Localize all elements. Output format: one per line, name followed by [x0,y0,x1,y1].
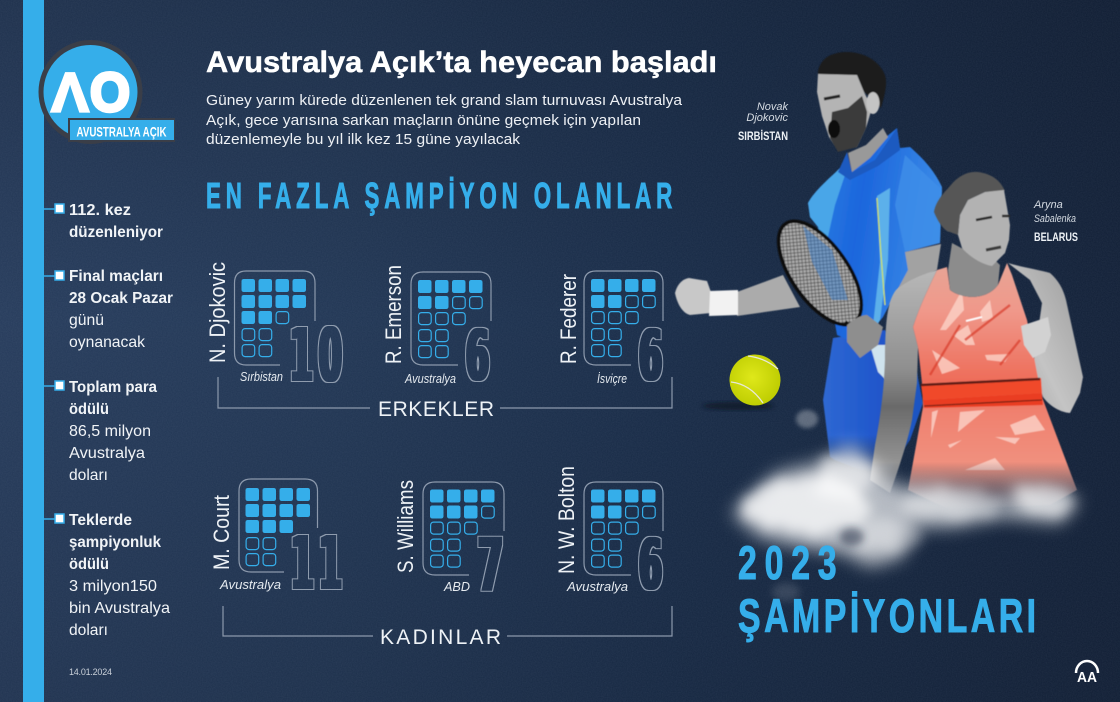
sidebar vertical bar [23,0,44,702]
section heading: en fazla şampiyon olanlar: EN FAZLA ŞAMPİYON OLANLAR [206,177,672,216]
chart: S. Williams 7: S. Williams [393,480,418,573]
logo: Avustralya Açık: O [90,61,130,123]
label: Novak Djokovic: SIRBİSTAN [738,130,788,143]
chart: S. Williams 7 [393,480,504,609]
chart: R. Emerson 6: Avustralya [404,371,456,386]
chart: R. Emerson 6 [381,265,491,397]
fact: 112. kez: 112. kez [69,202,131,219]
bracket and label: erkekler: ERKEKLER [378,398,494,421]
label: Aryna Sabalenka: Aryna [1033,199,1063,211]
fact: toplam para ödülü [44,379,157,484]
fact: teklerde şampiyonluk ödülü: ödülü [69,556,109,573]
intro text [206,92,683,148]
fact: teklerde şampiyonluk ödülü: 3 milyon150 [69,578,157,595]
chart: N. W. Bolton 6: N. W. Bolton [554,466,579,574]
fact: final maçları [44,268,173,351]
fact: toplam para ödülü: ödülü [69,401,109,418]
chart: N. Djokovic 10 [205,262,342,399]
chart: R. Emerson 6: R. Emerson [381,265,406,364]
fact: toplam para ödülü: Avustralya [69,445,145,462]
infographic canvas: 6 [639,315,662,397]
player photo: Novak Djokovic [675,52,942,470]
heading: 2023 şampiyonları [738,537,1036,642]
fact: final maçları: oynanacak [69,334,146,351]
bracket and label: kadınlar [223,606,672,649]
fact: final maçları: günü [69,312,104,329]
fact: toplam para ödülü: Toplam para [69,379,157,396]
fact: teklerde şampiyonluk ödülü: bin Avustralya [69,600,170,617]
chart: R. Federer 6 [556,271,663,397]
heading: 2023 şampiyonları: ŞAMPİYONLARI [738,590,1036,642]
chart: N. Djokovic 10: 10 [290,314,342,399]
label: Aryna Sabalenka: BELARUS [1034,232,1078,244]
bracket and label: kadınlar: KADINLAR [380,626,501,649]
chart: R. Emerson 6: 6 [466,315,489,397]
tennis ball [702,354,780,410]
fact: teklerde şampiyonluk ödülü: şampiyonluk [69,534,161,551]
fact: 112. kez [44,202,163,241]
chart: M. Court 11: 11 [291,522,342,607]
label: Aryna Sabalenka: Sabalenka [1034,213,1076,225]
bracket and label: erkekler [218,377,672,421]
logo: Avustralya Açık [38,40,175,144]
chart: R. Federer 6: İsviçre [597,371,627,386]
chart: M. Court 11: M. Court [209,495,234,570]
chart: R. Federer 6: R. Federer [556,274,581,364]
fact: teklerde şampiyonluk ödülü: doları [69,622,108,639]
chart: N. Djokovic 10: N. Djokovic [205,262,230,363]
label: Aryna Sabalenka [1033,199,1078,244]
fact: final maçları: 28 Ocak Pazar [69,290,173,307]
intro text: düzenlemeyle bu yıl ilk kez 15 güne yayılacak [206,131,521,148]
fact: final maçları: Final maçları [69,268,163,285]
heading: 2023 şampiyonları: 2023 [738,537,837,589]
label: Novak Djokovic [738,101,788,143]
logo: Avustralya Açık: Λ [51,60,89,124]
icon: AA agency logo [1076,661,1098,686]
fact: teklerde şampiyonluk ödülü: Teklerde [69,512,132,529]
player photo: Aryna Sabalenka [870,172,1083,510]
chart: S. Williams 7: ABD [443,579,470,594]
chart: M. Court 11 [209,479,342,607]
cloud [732,410,1080,601]
chart: N. W. Bolton 6 [554,466,663,606]
date: 14.01.2024 [69,667,112,677]
fact: toplam para ödülü: 86,5 milyon [69,423,151,440]
intro text: Açık, gece yarısına sarkan maçların önüne geçmek için yapılan [206,112,641,129]
infographic canvas: 6 [639,524,662,606]
chart: N. W. Bolton 6: Avustralya [566,579,628,594]
chart: N. Djokovic 10: Sırbistan [240,369,283,384]
fact: teklerde şampiyonluk ödülü [44,512,170,639]
intro text: Güney yarım kürede düzenlenen tek grand slam turnuvası Avustralya [206,92,683,109]
fact: 112. kez: düzenleniyor [69,224,163,241]
fact: toplam para ödülü: doları [69,467,108,484]
chart: S. Williams 7: 7 [478,523,503,609]
logo: Avustralya Açık: AVUSTRALYA AÇIK [76,124,166,140]
title: Avustralya Açık’ta heyecan başladı [206,46,717,79]
label: Novak Djokovic: Djokovic [746,112,788,124]
label: Novak Djokovic: Novak [757,101,788,113]
chart: M. Court 11: Avustralya [219,577,281,592]
icon: AA agency logo: AA [1077,669,1097,686]
